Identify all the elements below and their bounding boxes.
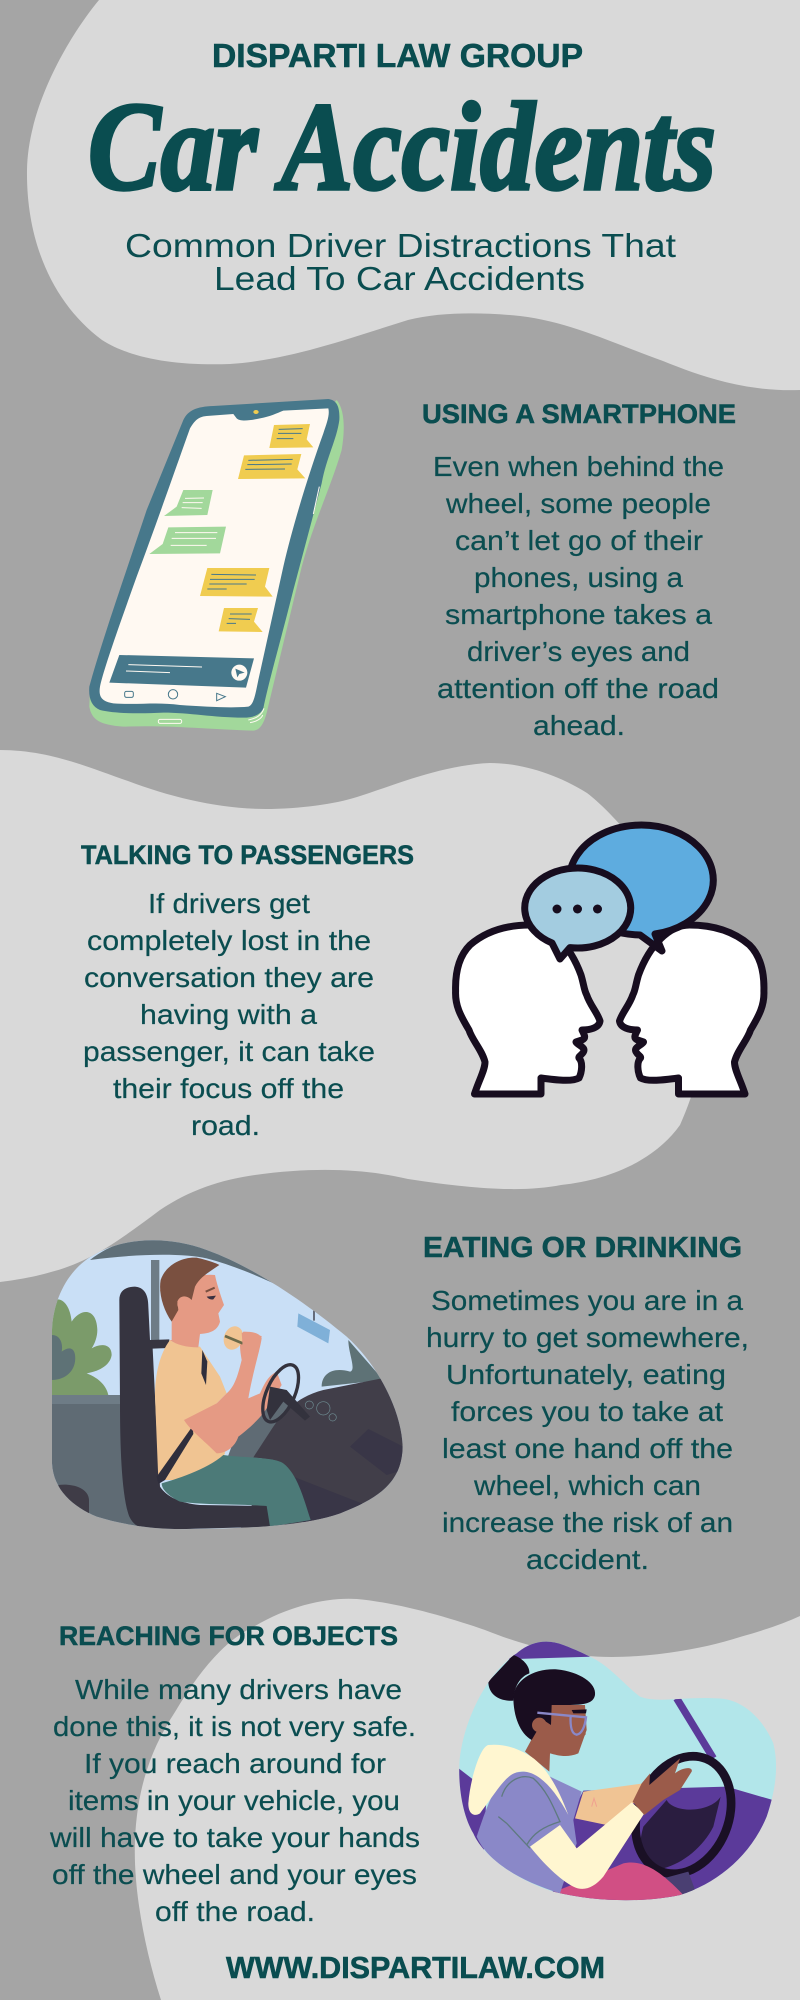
illustration: woman driving xyxy=(459,1642,776,1900)
icon: two heads talking xyxy=(456,825,764,1094)
body text: off the road. xyxy=(155,1896,315,1927)
body text: items in your vehicle, you xyxy=(68,1785,400,1816)
body text: hurry to get somewhere, xyxy=(426,1322,749,1353)
body text: Sometimes you are in a xyxy=(431,1285,743,1316)
body text: conversation they are xyxy=(84,962,374,993)
body text: can’t let go of their xyxy=(455,525,703,556)
body text: Unfortunately, eating xyxy=(446,1359,726,1390)
body text: wheel, which can xyxy=(473,1470,701,1501)
body text xyxy=(426,1285,749,1575)
body text: completely lost in the xyxy=(87,925,371,956)
body text: While many drivers have xyxy=(75,1674,402,1705)
heading: TALKING TO PASSENGERS xyxy=(81,840,414,870)
subtitle: Common Driver Distractions That xyxy=(125,227,676,264)
firm name: DISPARTI LAW GROUP xyxy=(212,37,583,74)
body text: If drivers get xyxy=(148,888,310,919)
title: Car Accidents xyxy=(88,78,716,217)
body text xyxy=(49,1674,420,1927)
body text: smartphone takes a xyxy=(445,599,712,630)
heading: REACHING FOR OBJECTS xyxy=(59,1621,398,1651)
body text: wheel, some people xyxy=(445,488,711,519)
background blob: reaching section xyxy=(135,1599,800,2000)
panel: eating or drinking xyxy=(40,1230,749,1575)
heading: EATING OR DRINKING xyxy=(423,1232,742,1264)
body text: ahead. xyxy=(533,710,625,741)
panel: talking to passengers xyxy=(81,825,764,1141)
body text xyxy=(83,888,375,1141)
body text: having with a xyxy=(140,999,317,1030)
body text: done this, it is not very safe. xyxy=(53,1711,416,1742)
icon: smartphone with chat bubbles xyxy=(89,399,344,731)
illustration: man eating at the wheel xyxy=(52,1240,403,1530)
body text: driver’s eyes and xyxy=(467,636,690,667)
body text: passenger, it can take xyxy=(83,1036,375,1067)
body text: forces you to take at xyxy=(451,1396,723,1427)
body text: attention off the road xyxy=(437,673,719,704)
header xyxy=(88,37,716,297)
body text: their focus off the xyxy=(113,1073,344,1104)
subtitle: Lead To Car Accidents xyxy=(214,260,585,297)
body text: road. xyxy=(191,1110,260,1141)
body text: increase the risk of an xyxy=(442,1507,733,1538)
subtitle xyxy=(125,227,676,297)
background blob: talking section xyxy=(0,750,704,1282)
body text: phones, using a xyxy=(474,562,683,593)
website footer: WWW.DISPARTILAW.COM xyxy=(226,1950,605,1985)
body text xyxy=(433,451,724,741)
body text: will have to take your hands xyxy=(49,1822,420,1853)
panel: reaching for objects xyxy=(50,1626,776,1922)
body text: Even when behind the xyxy=(433,451,724,482)
background blob: header xyxy=(27,0,800,390)
heading: USING A SMARTPHONE xyxy=(422,399,736,429)
body text: If you reach around for xyxy=(84,1748,386,1779)
body text: accident. xyxy=(526,1544,649,1575)
body text: least one hand off the xyxy=(442,1433,733,1464)
body text: off the wheel and your eyes xyxy=(52,1859,417,1890)
panel: using a smartphone xyxy=(89,399,736,741)
